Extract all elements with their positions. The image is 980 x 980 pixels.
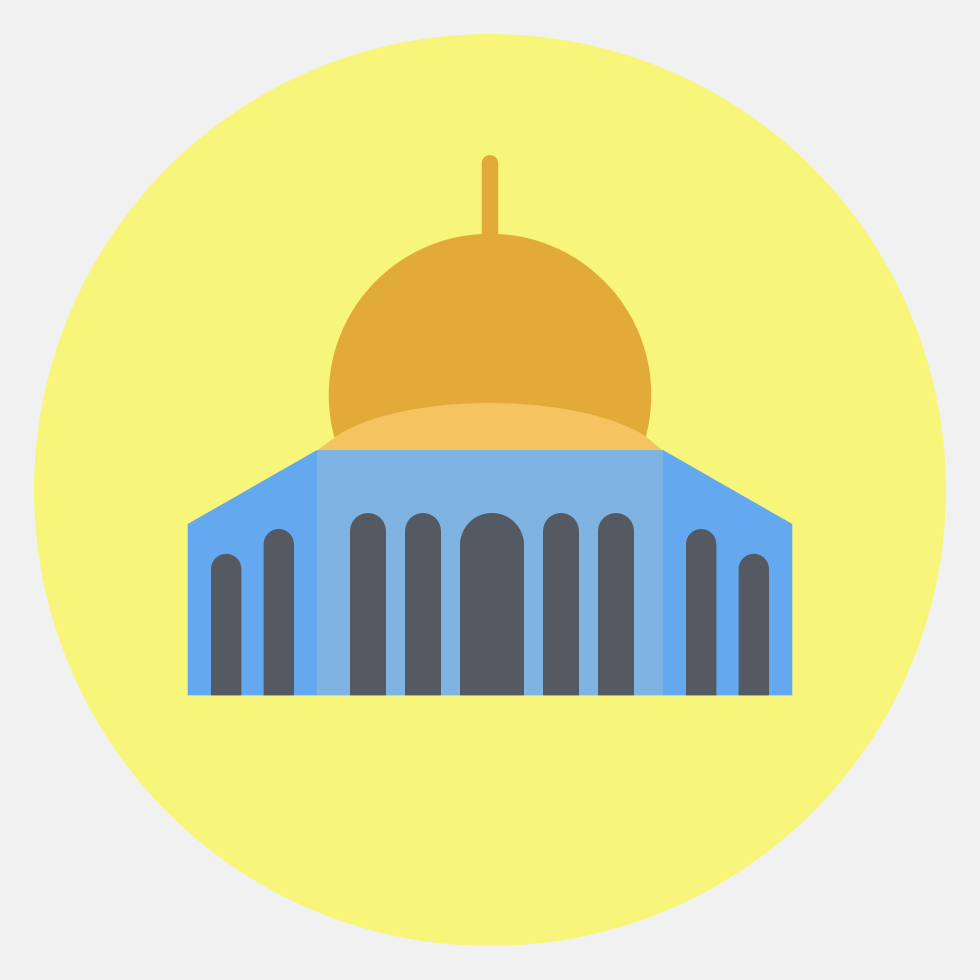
icon: arched windows xyxy=(211,513,769,695)
icon: dome base xyxy=(318,403,662,450)
icon: dome xyxy=(329,234,651,556)
panel: left wing wall xyxy=(188,450,317,695)
icon: spire xyxy=(482,155,498,240)
panel: right wing wall xyxy=(663,450,792,695)
panel: central wall xyxy=(317,450,663,695)
